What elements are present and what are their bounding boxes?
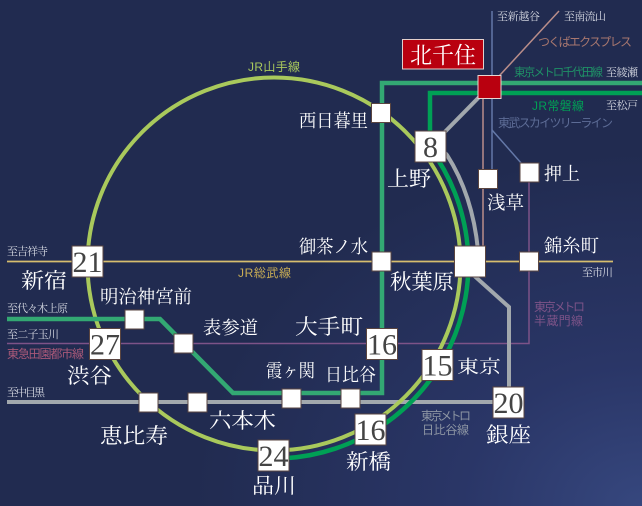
line: JR Sobu	[7, 260, 613, 262]
line names: 半蔵門線	[534, 313, 583, 328]
line names: JR常磐線	[532, 98, 584, 113]
line names	[7, 35, 632, 437]
line names: 東京メトロ千代田線	[514, 66, 604, 79]
station names: 表参道	[203, 318, 258, 338]
numbered stations: 16	[356, 414, 386, 447]
line: JR Joban	[285, 93, 642, 458]
numbered stations: 21	[72, 246, 102, 279]
station names: 浅草	[487, 193, 524, 213]
station names: 東京	[457, 357, 501, 377]
station names: 秋葉原	[390, 270, 454, 294]
direction labels: 至綾瀬	[606, 65, 639, 79]
direction labels: 至南流山	[564, 9, 606, 23]
station names: 渋谷	[67, 364, 112, 388]
station names: 明治神宮前	[100, 287, 192, 307]
direction labels: 至吉祥寺	[7, 244, 48, 258]
station names: 大手町	[295, 315, 363, 339]
station names: 霞ヶ関	[266, 361, 315, 381]
Kita-Senju marker	[478, 76, 501, 98]
numbered stations: 16	[367, 328, 397, 362]
numbered stations	[72, 131, 524, 473]
station names: 銀座	[486, 423, 531, 447]
station markers small	[125, 104, 539, 412]
station names: 六本木	[209, 409, 276, 433]
line names: つくばエクスプレス	[538, 35, 632, 49]
line names: 東京メトロ	[421, 409, 471, 423]
station names: 御茶ノ水	[299, 237, 368, 257]
numbered stations: 20	[494, 387, 524, 420]
Kita-Senju title: 北千住	[410, 43, 476, 68]
station names: 西日暮里	[299, 111, 368, 131]
line: Hibiya	[7, 87, 509, 402]
numbered stations: 24	[258, 440, 288, 473]
line names: 東急田園都市線	[7, 346, 84, 361]
line: Hanzomon	[7, 172, 529, 344]
station names: 上野	[387, 167, 431, 191]
station names	[21, 111, 599, 498]
station names: 押上	[544, 164, 580, 184]
line names: JR総武線	[238, 265, 291, 280]
station names: 品川	[252, 474, 296, 498]
numbered stations: 27	[90, 328, 120, 362]
station names: 恵比寿	[100, 424, 168, 448]
station names: 日比谷	[325, 365, 376, 385]
direction labels	[7, 9, 639, 399]
line names: 東武スカイツリーライン	[498, 116, 613, 130]
direction labels: 至新越谷	[497, 9, 540, 23]
direction labels: 至中目黒	[7, 385, 46, 399]
station: Akihabara marker	[454, 246, 486, 277]
station names: 新橋	[346, 450, 391, 474]
numbered stations: 15	[422, 350, 452, 382]
line: Yamanote	[88, 78, 460, 450]
line names: 日比谷線	[422, 422, 469, 437]
numbered stations: 8	[423, 131, 438, 164]
line names: 東京メトロ	[534, 300, 585, 314]
line names: JR山手線	[248, 59, 300, 74]
direction labels: 至市川	[582, 266, 613, 279]
direction labels: 至代々木上原	[7, 301, 68, 315]
direction labels: 至二子玉川	[7, 328, 59, 341]
station names: 新宿	[21, 269, 67, 293]
line: Tobu Skytree	[492, 11, 529, 172]
station names: 錦糸町	[544, 236, 599, 256]
line: Tsukuba Express	[483, 11, 559, 261]
direction labels: 至松戸	[606, 98, 638, 112]
line: Chiyoda	[7, 83, 642, 393]
